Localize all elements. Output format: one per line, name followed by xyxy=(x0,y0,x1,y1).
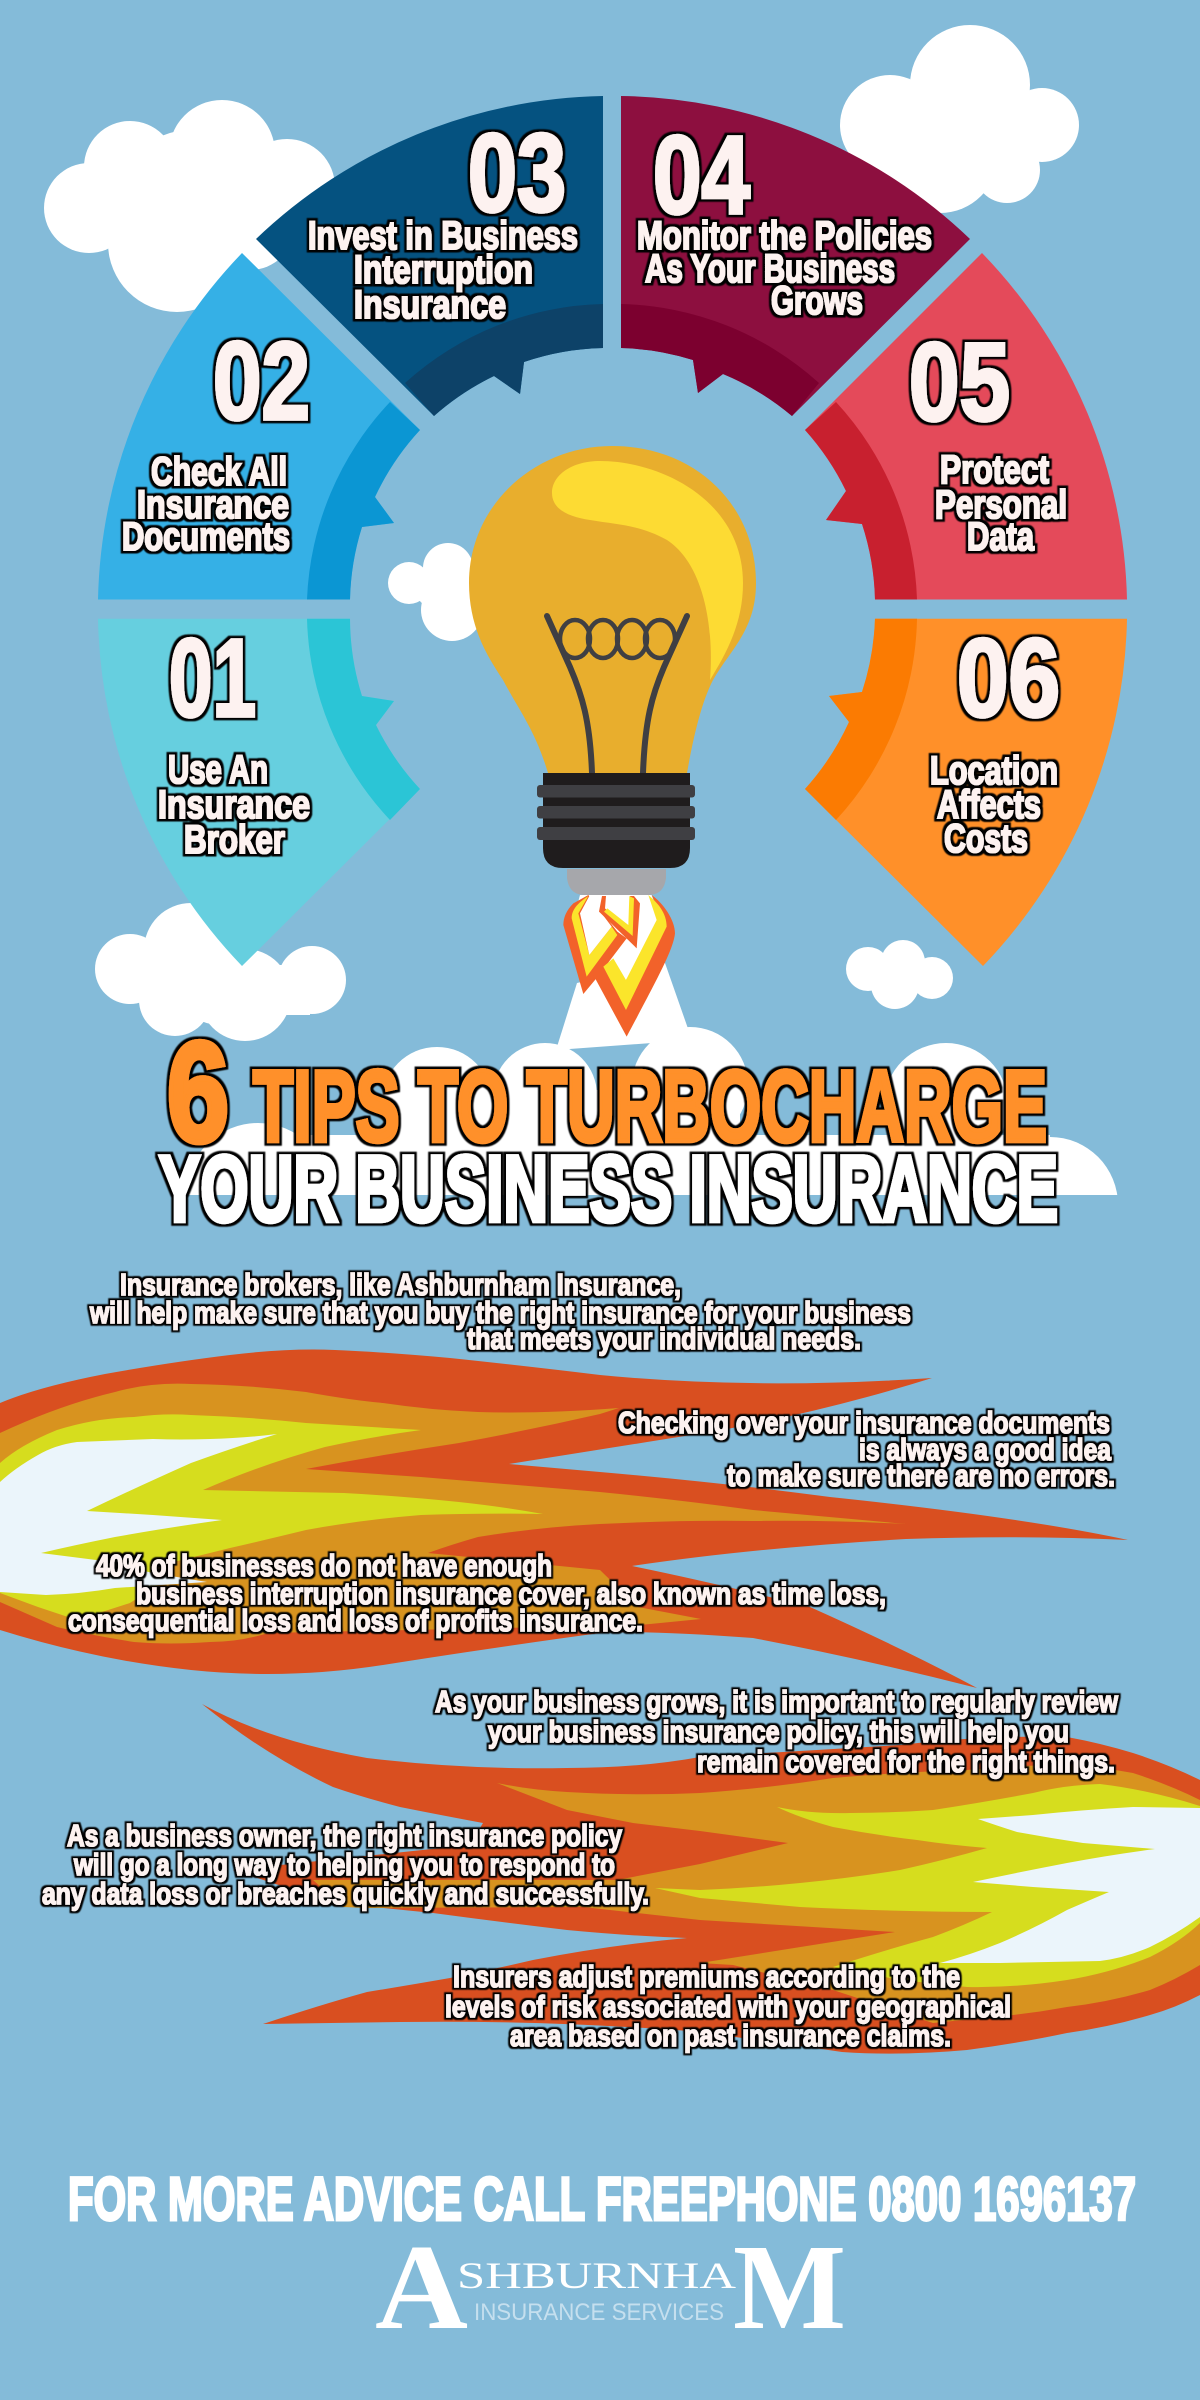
tip 01 text xyxy=(158,617,310,862)
text block: tip 1 explanation xyxy=(89,1267,911,1356)
panel: tip 03 segment xyxy=(256,96,603,416)
cloud: lower left xyxy=(95,903,346,1041)
tip 05 text: Data xyxy=(967,515,1035,559)
tip 05 text xyxy=(909,321,1067,559)
text block: tip 4 explanation xyxy=(435,1684,1119,1779)
tip 02 text: Check All xyxy=(151,450,287,494)
cloud: upper right xyxy=(840,25,1079,213)
clouds and exhaust behind title xyxy=(188,963,1118,1195)
text block: tip 3 explanation: business interruption insurance cover, also known as time loss, xyxy=(136,1576,886,1611)
tip 01 text: 01 xyxy=(169,617,256,740)
logo: Ashburnham Insurance Services: A xyxy=(375,2220,468,2355)
text block: tip 6 explanation: area based on past insurance claims. xyxy=(510,2018,951,2053)
text block: tip 1 explanation: that meets your individual needs. xyxy=(467,1321,861,1356)
text block: tip 1 explanation: Insurance brokers, like Ashburnham Insurance, xyxy=(120,1267,681,1302)
text block: tip 5 explanation: any data loss or breaches quickly and successfully. xyxy=(42,1876,649,1911)
panel: tip 05 segment xyxy=(805,253,1127,600)
tip 06 text: Location xyxy=(930,749,1058,793)
tip 02 text: 02 xyxy=(213,320,310,443)
tip 06 text: Affects xyxy=(937,783,1041,827)
tip 06 text: 06 xyxy=(957,617,1060,740)
tip 04 text: As Your Business xyxy=(645,247,895,291)
text block: tip 4 explanation: your business insurance policy, this will help you xyxy=(488,1714,1069,1749)
text block: tip 1 explanation: will help make sure that you buy the right insurance for your business xyxy=(89,1295,911,1330)
text block: tip 2 explanation: to make sure there are no errors. xyxy=(727,1458,1115,1493)
panel: tip 04 segment xyxy=(621,96,970,416)
tip 01 text: Insurance xyxy=(158,783,310,827)
text block: tip 2 explanation: is always a good idea xyxy=(859,1432,1112,1467)
panel: tip 01 segment xyxy=(98,619,420,966)
tip 02 text xyxy=(122,320,310,559)
text block: tip 5 explanation: As a business owner, the right insurance policy xyxy=(67,1818,623,1853)
tip 03 text: Invest in Business xyxy=(308,214,578,258)
flame: upper, blazing from the left xyxy=(0,1350,1128,1688)
text block: tip 6 explanation xyxy=(445,1959,1011,2053)
cloud: behind bulb xyxy=(388,543,505,641)
tip 06 text xyxy=(930,617,1060,861)
tip 01 text: Broker xyxy=(184,818,285,862)
tip 01 text: Use An xyxy=(168,748,268,792)
logo: Ashburnham Insurance Services: SHBURNHA xyxy=(457,2256,736,2297)
tip 02 text: Documents xyxy=(122,515,290,559)
tip 05 text: 05 xyxy=(909,321,1010,444)
tip 04 text: Monitor the Policies xyxy=(637,214,932,258)
title xyxy=(159,1013,1058,1241)
icon: light bulb xyxy=(469,446,756,895)
text block: tip 5 explanation: will go a long way to helping you to respond to xyxy=(73,1847,615,1882)
logo: Ashburnham Insurance Services xyxy=(375,2220,846,2355)
panel: tip 02 segment xyxy=(98,253,420,600)
text block: tip 6 explanation: Insurers adjust premiums according to the xyxy=(453,1959,960,1994)
logo: Ashburnham Insurance Services: INSURANCE SERVICES xyxy=(474,2299,724,2326)
tip 03 text: Insurance xyxy=(354,283,506,327)
bulb highlight xyxy=(552,461,743,680)
tip 03 text: Interruption xyxy=(354,248,533,292)
panel: tip 06 segment xyxy=(805,619,1127,966)
screw base xyxy=(543,773,690,868)
text block: tip 6 explanation: levels of risk associated with your geographical xyxy=(445,1989,1011,2024)
bulb glass xyxy=(469,446,756,773)
text block: tip 2 explanation xyxy=(618,1405,1115,1493)
title: 6 xyxy=(167,1013,229,1172)
tip 03 text xyxy=(308,112,578,327)
cloud: lower right small xyxy=(846,940,953,1009)
flame: lower, blazing from the right xyxy=(202,1704,1200,2054)
text block: tip 5 explanation xyxy=(42,1818,649,1911)
text block: tip 3 explanation: 40% of businesses do not have enough xyxy=(96,1548,552,1583)
tip 04 text: 04 xyxy=(653,114,750,237)
tip 05 text: Protect xyxy=(940,448,1049,492)
text block: tip 3 explanation xyxy=(68,1548,886,1638)
tip 06 text: Costs xyxy=(944,817,1028,861)
text block: tip 3 explanation: consequential loss and loss of profits insurance. xyxy=(68,1603,643,1638)
tip 04 text xyxy=(637,114,932,323)
neck xyxy=(567,869,666,895)
tip 02 text: Insurance xyxy=(137,483,289,527)
filament xyxy=(547,616,687,773)
tip 03 text: 03 xyxy=(468,112,566,235)
tip 04 text: Grows xyxy=(771,279,863,323)
tip 05 text: Personal xyxy=(935,483,1067,527)
cloud: upper left xyxy=(44,100,335,312)
logo: Ashburnham Insurance Services: M xyxy=(733,2220,846,2355)
icon: rocket flame xyxy=(563,895,675,1037)
